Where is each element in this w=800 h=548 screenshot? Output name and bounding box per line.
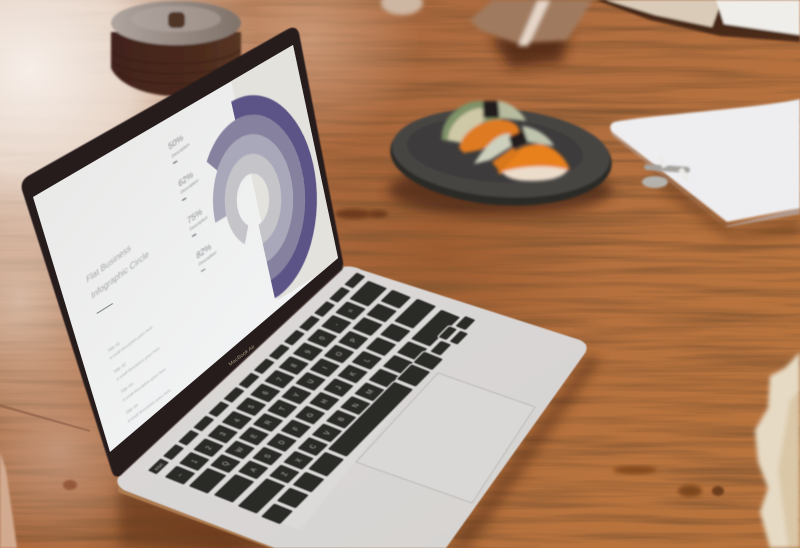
wooden tray with chopstick <box>470 0 593 68</box>
shift key row: V <box>323 430 333 436</box>
number key row: 5 <box>247 404 257 410</box>
slide title: Flat Business <box>86 242 132 285</box>
laptop <box>22 28 600 548</box>
label 50%: Description <box>171 141 190 159</box>
notebook shadow <box>650 160 800 240</box>
number key row <box>164 280 388 485</box>
label 75% <box>187 208 208 238</box>
number key row: 6 <box>261 391 271 396</box>
plate shadow <box>388 164 612 216</box>
concentric infographic chart <box>206 94 318 299</box>
number key row: 2 <box>204 445 214 451</box>
label 50% <box>168 134 190 164</box>
qwerty key row: P <box>349 337 359 343</box>
screen lid <box>22 28 344 477</box>
bezel <box>22 28 344 477</box>
item 3: A small description goes here <box>122 366 166 403</box>
home key row <box>213 298 437 503</box>
home key row: F <box>292 426 301 432</box>
plate of sushi <box>387 101 615 216</box>
wooden lidded container <box>111 1 241 96</box>
plate <box>387 101 615 213</box>
label 82% <box>196 244 217 272</box>
qwerty key row: I <box>321 366 330 370</box>
home key row: G <box>306 412 316 418</box>
function key row: esc <box>154 462 166 471</box>
shift key row: X <box>294 457 305 463</box>
ring 75 percent <box>212 134 293 262</box>
trackpad <box>356 373 535 503</box>
list of items <box>107 324 171 424</box>
shift key row: B <box>337 416 347 422</box>
qwerty key row: T <box>278 406 288 412</box>
number key row: ~ <box>176 473 186 478</box>
MacBook Air wordmark: MacBook Air <box>228 344 256 368</box>
shift key row: N <box>351 403 361 409</box>
item 4: A small description goes here <box>127 387 171 424</box>
keyboard <box>147 272 481 525</box>
shift key row <box>237 309 461 514</box>
notebook pages <box>610 99 800 227</box>
metal clip <box>642 155 690 188</box>
home key row: L <box>363 358 373 363</box>
clipboard notebook <box>610 99 800 240</box>
qwerty key row: Q <box>221 461 231 467</box>
qwerty key row <box>188 289 412 494</box>
number key row: 0 <box>318 336 328 341</box>
item 4: Title #4 <box>125 402 138 416</box>
label 82%: 82% <box>196 241 212 261</box>
pale object at the bottom-left edge <box>0 452 17 548</box>
home key row: K <box>348 371 359 377</box>
display <box>33 45 338 452</box>
item 2: Title #2 <box>113 361 126 375</box>
label 62%: 62% <box>178 169 194 189</box>
label 62%: Description <box>180 177 199 195</box>
slide title: Infographic Circle <box>91 248 150 301</box>
function key row <box>147 272 366 475</box>
qwerty key row: O <box>335 351 345 357</box>
qwerty key row: U <box>306 379 317 385</box>
item 2: A small description goes here <box>116 345 160 382</box>
open book top right <box>596 0 800 42</box>
number key row: 8 <box>290 363 299 368</box>
home key row: J <box>335 385 344 390</box>
ring 50 percent <box>231 94 318 299</box>
ring 82 percent <box>225 154 281 244</box>
label 50%: 50% <box>168 132 184 152</box>
label 75%: 75% <box>187 206 203 226</box>
item 1: Title #1 <box>107 340 120 354</box>
label 82%: Description <box>198 249 217 267</box>
number key row: = <box>346 308 356 314</box>
item 1: A small description goes here <box>109 324 153 361</box>
sushi pieces <box>442 101 570 181</box>
number key row: 7 <box>275 377 285 382</box>
home key row: S <box>263 453 274 459</box>
home key row: D <box>277 440 288 446</box>
number key row: 9 <box>304 349 314 355</box>
qwerty key row: Y <box>292 392 302 398</box>
title divider <box>96 303 113 314</box>
number key row: 3 <box>219 432 228 437</box>
small ceramic cup at the top edge <box>381 0 423 15</box>
ring 62 percent <box>206 114 305 280</box>
shift key row: M <box>365 389 376 395</box>
right slide panel tint <box>231 40 342 300</box>
number key row: 1 <box>190 459 200 464</box>
percent labels <box>168 132 217 272</box>
qwerty key row: R <box>264 420 274 426</box>
shift key row: Z <box>280 472 290 477</box>
qwerty key row: E <box>250 433 260 439</box>
laptop shadow <box>118 352 600 548</box>
number key row: - <box>333 323 341 327</box>
item 3: Title #3 <box>120 381 133 395</box>
shift key row: C <box>308 444 319 450</box>
qwerty key row: W <box>235 446 246 454</box>
label 75%: Description <box>189 214 208 232</box>
number key row: 4 <box>233 418 243 423</box>
home key row: A <box>249 467 259 473</box>
keyboard well <box>142 280 470 530</box>
label 62% <box>178 172 199 202</box>
home key row: H <box>320 399 330 405</box>
cream fabric bottom right <box>755 352 800 548</box>
bottom key row with space bar <box>260 313 481 525</box>
laptop base <box>117 266 587 548</box>
